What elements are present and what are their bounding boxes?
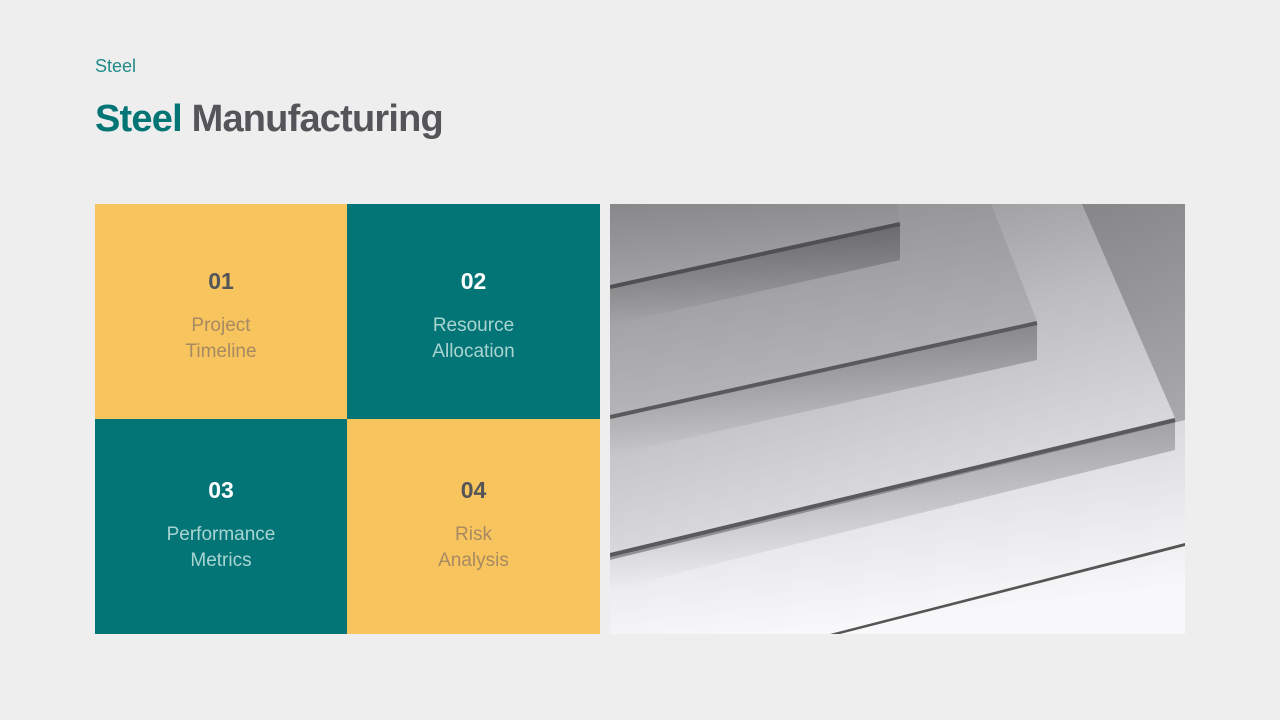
tile 04: 04: [461, 477, 486, 503]
tile 04: Risk: [455, 524, 492, 545]
title: Steel Manufacturing: [95, 98, 443, 140]
subtitle: Steel: [95, 56, 136, 76]
image: steel plates: [610, 204, 1185, 634]
grid of four tiles: [95, 204, 600, 634]
tile 01: 01: [208, 268, 234, 294]
tile 01: Timeline: [185, 341, 257, 362]
tile 03: [95, 419, 347, 634]
tile 02: 02: [461, 268, 486, 294]
tile 01: Project: [191, 315, 251, 336]
tile 02: Allocation: [432, 341, 515, 362]
tile 02: [347, 204, 600, 419]
tile 03: Metrics: [190, 550, 252, 571]
tile 01: [95, 204, 347, 419]
tile 04: Analysis: [438, 550, 509, 571]
tile 04: [347, 419, 600, 634]
tile 03: 03: [208, 477, 234, 503]
tile 03: Performance: [167, 524, 275, 545]
tile 02: Resource: [433, 315, 514, 336]
